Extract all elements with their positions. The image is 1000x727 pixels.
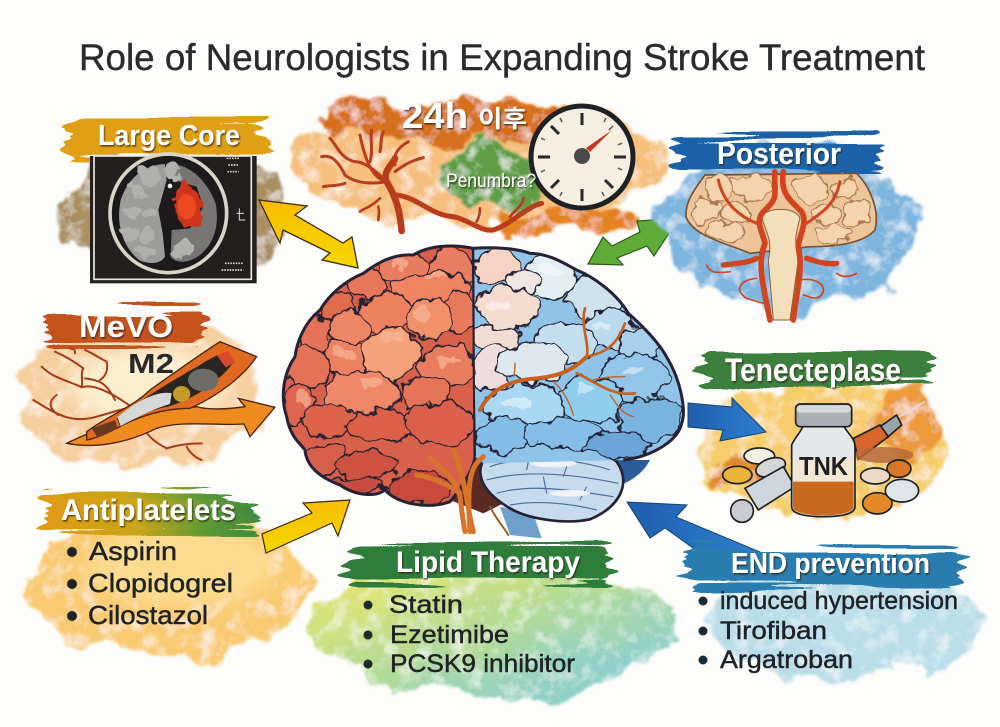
heading: 24h: 24h: [402, 95, 468, 136]
label: TNK: TNK: [799, 451, 848, 481]
vial, syringe and pills: [723, 402, 925, 522]
panel: MeVO: [17, 309, 275, 467]
heading: tenecteplase: Tenecteplase: [725, 352, 901, 388]
arrow: brain to posterior: [588, 218, 679, 265]
banner: MeVO: [44, 309, 204, 345]
banner: antiplatelets: [42, 494, 257, 532]
list: END prevention: Argatroban: [720, 646, 853, 674]
list: lipid therapy: [364, 591, 575, 678]
dark base between hemispheres: [443, 453, 503, 513]
heading: lipid therapy: Lipid Therapy: [396, 546, 580, 579]
list: END prevention: [698, 587, 958, 674]
list: antiplatelets: [67, 536, 233, 630]
list: antiplatelets: Cilostazol: [88, 600, 208, 630]
list: END prevention: induced hypertension: [720, 587, 958, 615]
list: antiplatelets: Aspirin: [89, 536, 177, 566]
heading: posterior: Posterior: [717, 136, 841, 171]
panel: antiplatelets: [32, 494, 312, 660]
heading: 24h korean: 이후: [478, 106, 527, 133]
label: penumbra: Penumbra?: [446, 171, 536, 192]
banner: posterior: [675, 138, 880, 170]
panel: 24h: [293, 95, 663, 232]
panel: large core: [54, 120, 298, 283]
label: M2: M2: [128, 348, 174, 379]
clock: [531, 106, 633, 208]
panel: END prevention: [686, 548, 980, 678]
left hemisphere: [284, 248, 474, 504]
panel: posterior: [662, 136, 918, 320]
brain stem illustration: [686, 172, 876, 320]
list: antiplatelets: Clopidogrel: [88, 568, 233, 598]
brain stem: [500, 507, 542, 538]
CT scan: [90, 154, 257, 283]
midline fissure: [473, 248, 475, 457]
left hemisphere outline: [283, 246, 475, 505]
banner: lipid therapy: [348, 546, 610, 586]
arrow: large core to brain: [259, 200, 358, 268]
cerebellum: [480, 446, 623, 521]
panel: tenecteplase: [700, 350, 944, 522]
heading: antiplatelets: Antiplatelets: [61, 494, 236, 527]
penumbra region: [437, 140, 537, 208]
arterial tree: [322, 130, 542, 231]
middle cerebral artery: [480, 308, 635, 417]
occluded vessel: [33, 342, 275, 460]
heading: MeVO: MeVO: [79, 309, 173, 344]
list: END prevention: Tirofiban: [720, 617, 827, 645]
panel: lipid therapy: [313, 546, 677, 696]
brain: [270, 230, 703, 538]
right lower dark shadow: [617, 460, 650, 485]
list: lipid therapy: Statin: [389, 591, 463, 619]
arrow: tenecteplase to brain: [688, 398, 766, 441]
right hemisphere outline: [473, 248, 683, 460]
arrow: END prevention to brain: [627, 502, 760, 578]
heading: large core: Large Core: [98, 120, 240, 152]
orange arrow and lower vessel: [67, 398, 275, 445]
stem arteries: [417, 450, 508, 535]
arrow: antiplatelets to brain: [262, 500, 350, 553]
banner: END prevention: [686, 548, 961, 584]
heading: END prevention: END prevention: [731, 548, 930, 580]
banner: large core: [68, 120, 266, 158]
list: lipid therapy: PCSK9 inhibitor: [390, 650, 575, 678]
list: lipid therapy: Ezetimibe: [390, 621, 509, 649]
banner: tenecteplase: [700, 350, 932, 388]
title: Role of Neurologists in Expanding Stroke Treatment: [79, 37, 926, 78]
right hemisphere: [474, 249, 682, 464]
